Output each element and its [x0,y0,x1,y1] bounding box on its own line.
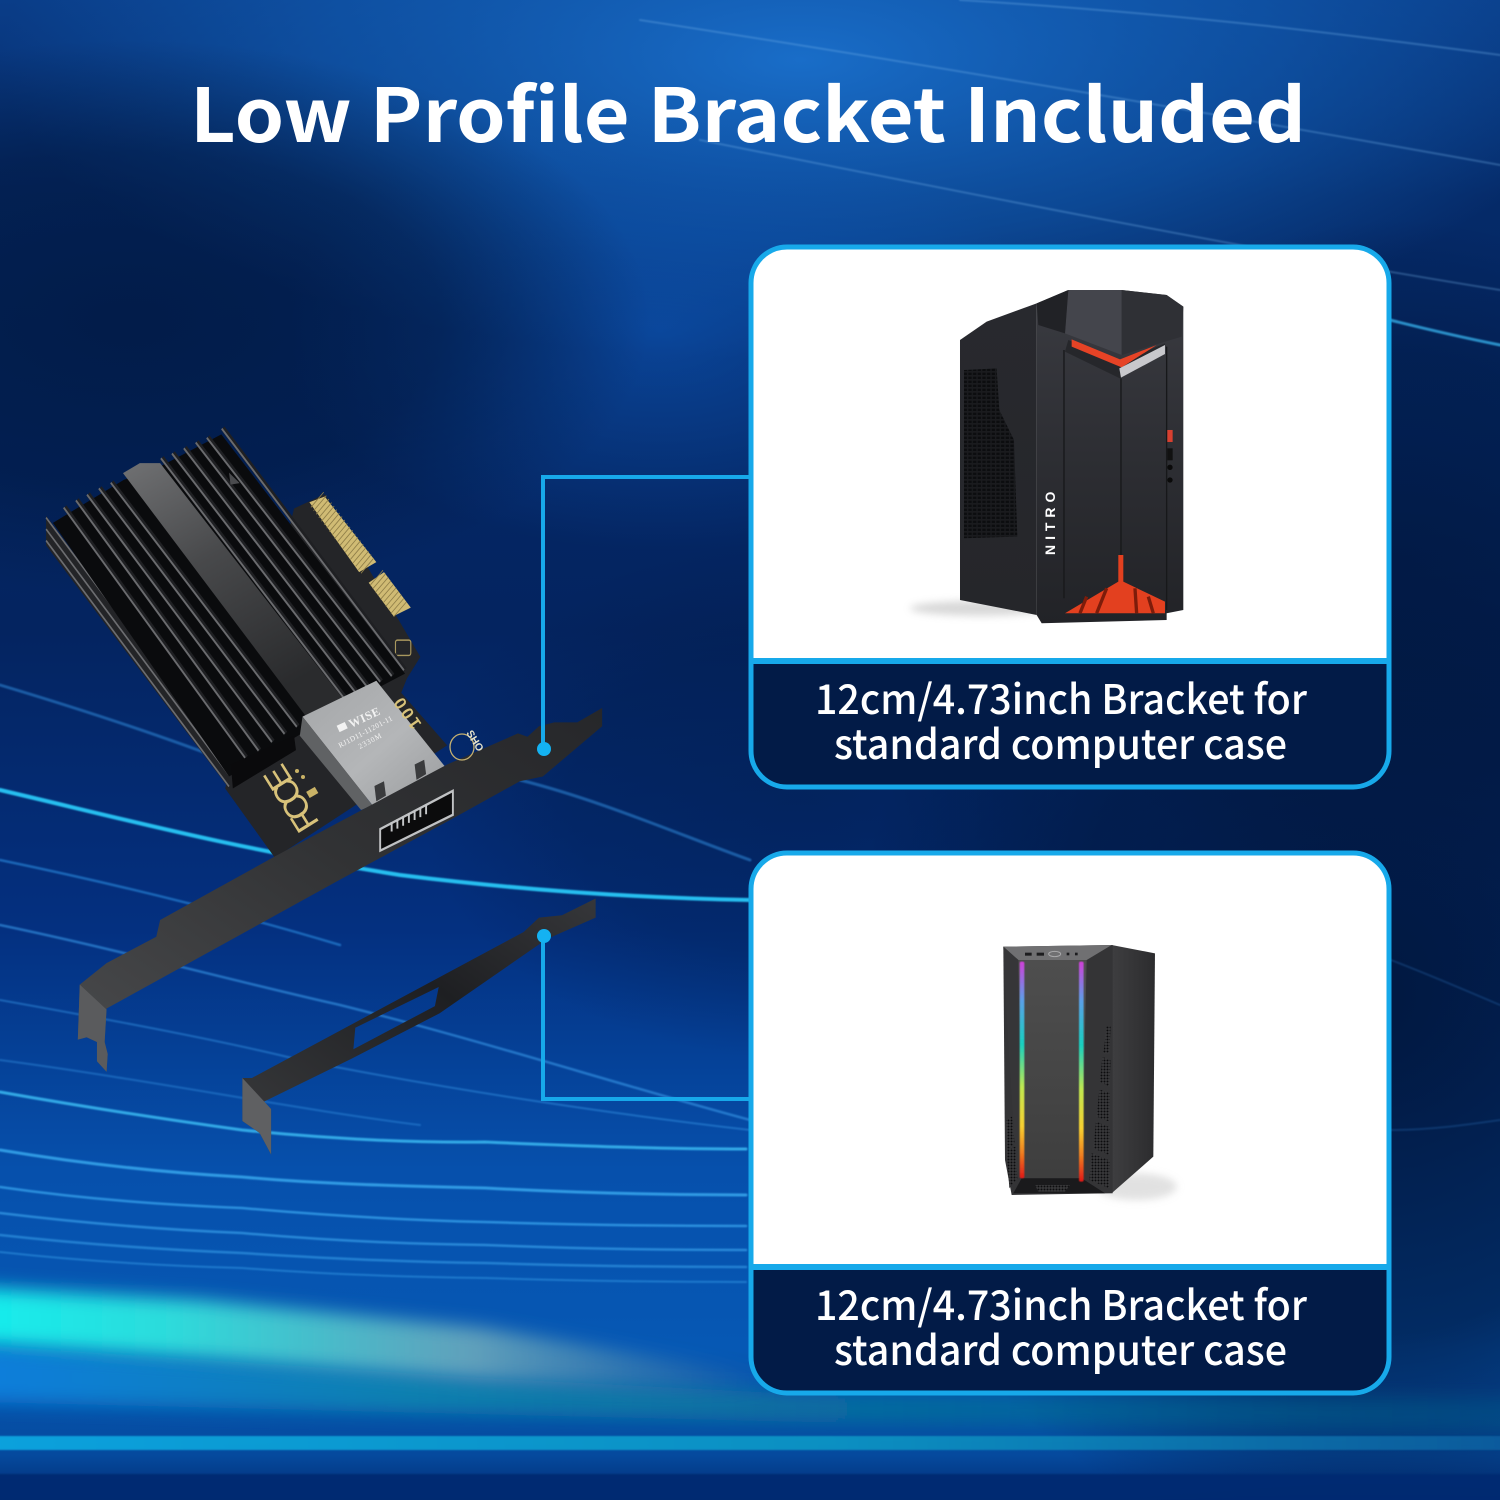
title: Low Profile Bracket Included [190,57,1306,164]
PCB markings: FCC, CE, 100, ROHS: FCCE [256,758,327,839]
RJ45 jack shield [300,681,445,810]
main bracket with port opening [78,708,602,1072]
loose low-profile bracket [242,898,596,1154]
icon: gaming PC tower with red V light [910,290,1183,623]
caption 1 [815,666,1307,771]
caption 1: standard computer case [834,711,1287,771]
card 1: standard computer case [751,247,1389,787]
card 2: standard computer case [751,853,1389,1393]
heatsink top surface with fins [53,428,405,788]
connector line: lower bracket to card 2 [537,929,749,1099]
NITRO logo: NITRO [1042,492,1058,555]
jack shield label: WISE [346,704,382,731]
jack shield label: 2330M [357,731,383,751]
heatsink side face [46,516,229,788]
caption 2: 12cm/4.73inch Bracket for [815,1272,1307,1332]
PCB board with gold fingers [225,494,447,858]
caption 1: 12cm/4.73inch Bracket for [815,666,1307,726]
PCB markings: FCC, CE, 100, ROHS [256,694,486,839]
jack shield label: RJ1D11-11201-11 [337,714,394,750]
caption 2: standard computer case [834,1317,1287,1377]
product illustration: network card with low-profile bracket [46,428,602,1154]
PCB markings: FCC, CE, 100, ROHS: 100 [390,694,425,733]
PCB markings: FCC, CE, 100, ROHS: SHO [463,728,486,754]
icon: PC tower with RGB light strips [1003,945,1177,1200]
connector line: upper bracket to card 1 [537,477,749,756]
caption 2 [815,1272,1307,1377]
